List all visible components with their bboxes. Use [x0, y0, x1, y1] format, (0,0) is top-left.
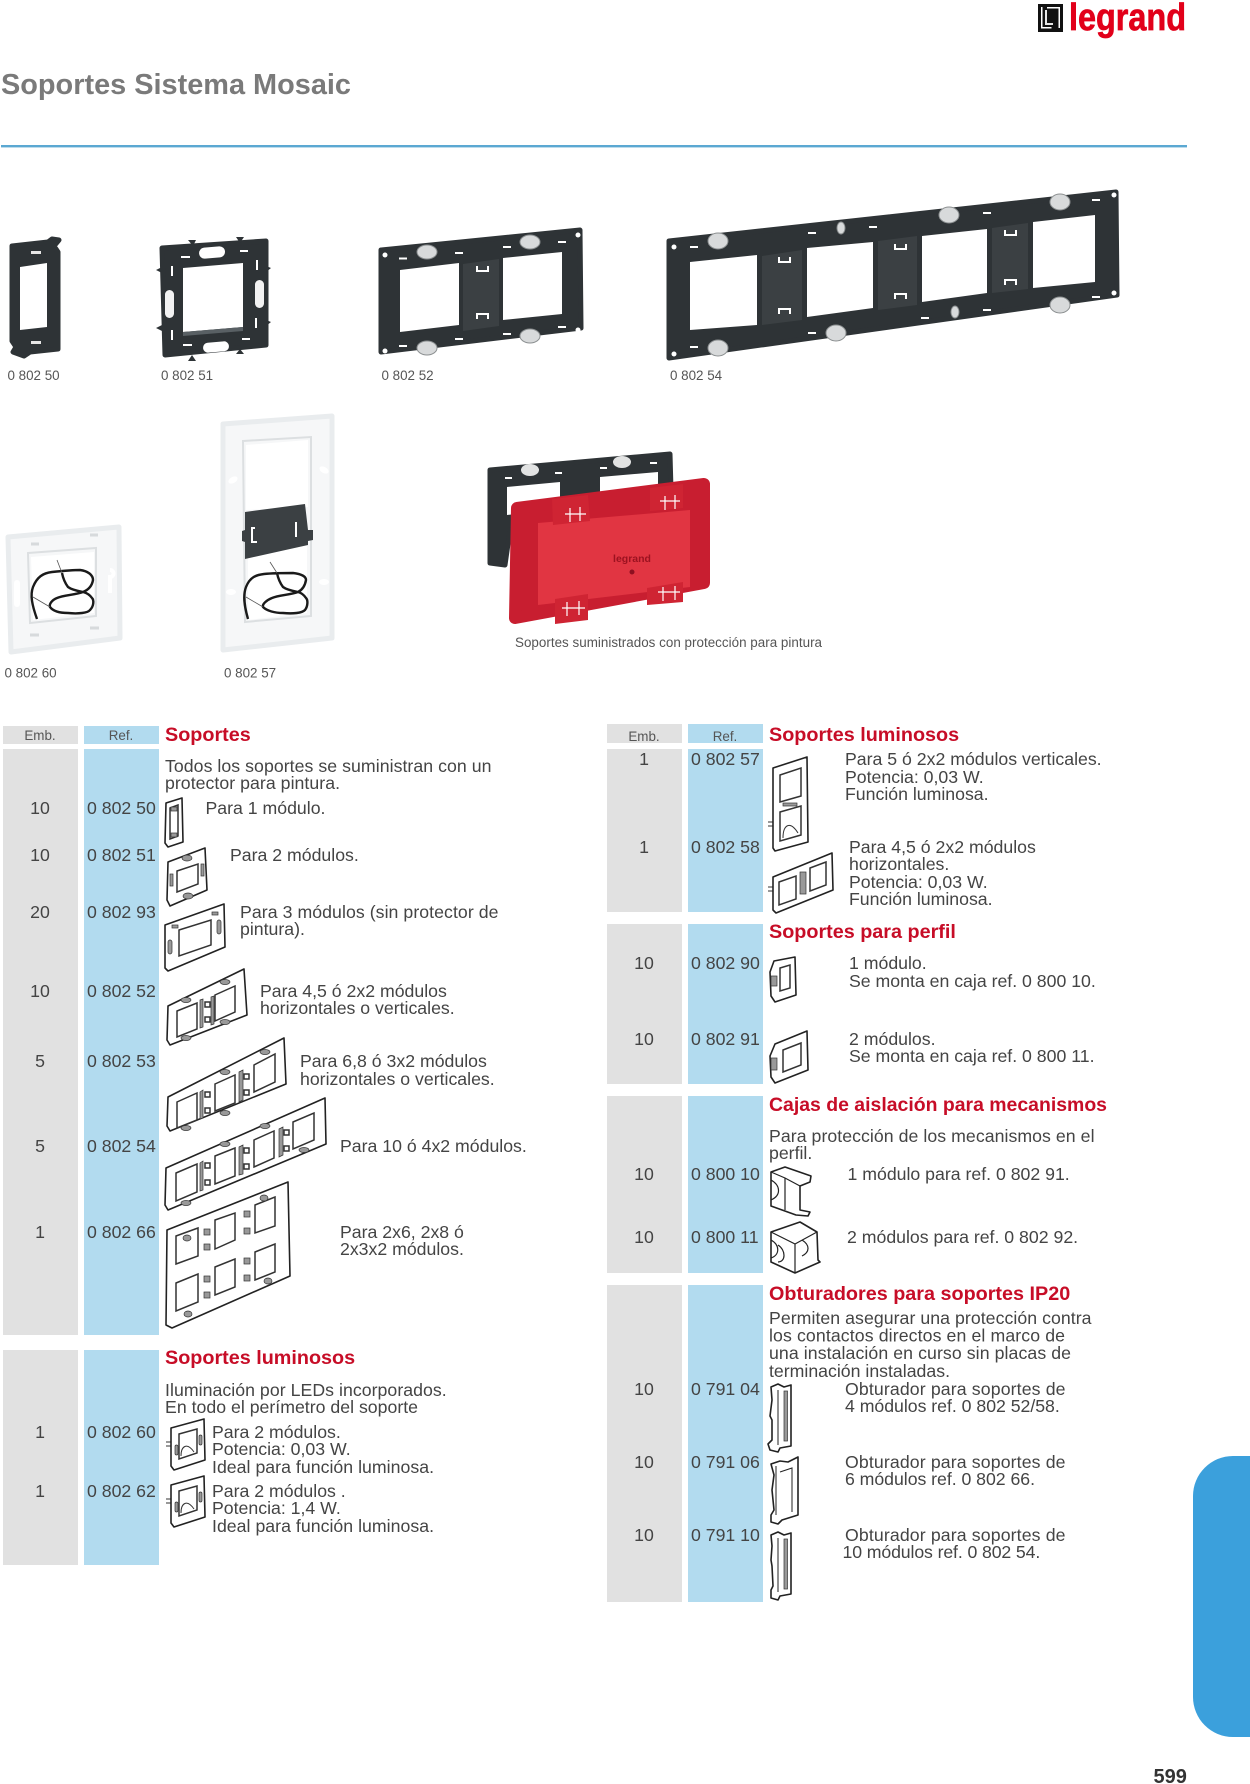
row: 0 802 52: 10	[30, 981, 50, 1001]
table panel: Soportes (left column)	[3, 724, 527, 1335]
column backgrounds	[3, 1350, 159, 1565]
photo: support 0 802 54	[669, 192, 1117, 358]
row: 0 802 93: 0 802 93	[87, 902, 156, 922]
row: 0 802 58: 0 802 58	[691, 837, 760, 857]
intro text	[165, 756, 492, 793]
row: 0 802 53: 5	[35, 1051, 45, 1071]
row: 0 802 66: 1	[35, 1222, 45, 1242]
row: 0 800 10	[634, 1164, 1070, 1216]
header: Ref.	[84, 726, 159, 744]
row: 0 800 11: 2 módulos para ref. 0 802 92.	[847, 1227, 1078, 1247]
photo: support with paint protector	[490, 454, 704, 624]
row: 0 802 51: Para 2 módulos.	[230, 845, 359, 865]
row: 0 802 51	[30, 845, 359, 906]
row: 0 802 58	[639, 837, 1036, 913]
row: 0 802 66: 0 802 66	[87, 1222, 156, 1242]
intro text: los contactos directos en el marco de	[769, 1326, 1065, 1346]
intro text: protector para pintura.	[165, 773, 340, 793]
row: 0 791 04: Obturador para soportes de	[845, 1379, 1066, 1399]
row: 0 802 93	[30, 902, 499, 971]
row: 0 791 04: 10	[634, 1379, 654, 1399]
icon: 3 module support	[165, 904, 225, 971]
photo: support 0 802 51	[156, 237, 271, 361]
column backgrounds	[607, 1096, 763, 1273]
column backgrounds	[607, 749, 763, 912]
row: 0 802 66: Para 2x6, 2x8 ó	[340, 1222, 464, 1242]
row: 0 802 90: 0 802 90	[691, 953, 760, 973]
icon: profile support 1 module	[770, 957, 796, 1002]
row: 0 802 57: Función luminosa.	[845, 784, 989, 804]
row: 0 791 04: 4 módulos ref. 0 802 52/58.	[845, 1396, 1060, 1416]
row: 0 800 10: 10	[634, 1164, 654, 1184]
intro text: Permiten asegurar una protección contra	[769, 1308, 1092, 1328]
icon: horizontal luminous support	[768, 853, 833, 913]
intro text: perfil.	[769, 1143, 812, 1163]
row: 0 802 66: 2x3x2 módulos.	[340, 1239, 464, 1259]
row: 0 802 54: Para 10 ó 4x2 módulos.	[340, 1136, 527, 1156]
row: 0 802 60	[35, 1419, 434, 1477]
row: 0 802 60: Para 2 módulos.	[212, 1422, 341, 1442]
icon: 2x6 module support	[166, 1182, 290, 1328]
icon: 2 module support	[167, 848, 207, 906]
header: Ref.	[688, 724, 763, 744]
photo: luminous support 0 802 60	[8, 527, 120, 652]
heading: Soportes para perfil: Soportes para perfil	[769, 921, 956, 943]
icon: 4 module support	[167, 969, 247, 1045]
row: 0 802 54: 0 802 54	[87, 1136, 156, 1156]
icon: shutter 10 modules	[771, 1532, 791, 1600]
row: 0 802 57: Potencia: 0,03 W.	[845, 767, 984, 787]
row: 0 800 10: 0 800 10	[691, 1164, 760, 1184]
intro text: Todos los soportes se suministran con un	[165, 756, 492, 776]
label: 0 802 51: 0 802 51	[161, 368, 213, 383]
column backgrounds	[607, 1285, 763, 1602]
row: 0 802 58: Función luminosa.	[849, 889, 993, 909]
label: 0 802 54: 0 802 54	[670, 368, 723, 383]
row: 0 791 10	[634, 1525, 1066, 1600]
row: 0 802 50: Para 1 módulo.	[206, 798, 325, 818]
table panel: Soportes luminosos (left column)	[3, 1347, 447, 1565]
row: 0 802 90: 1 módulo.	[849, 953, 927, 973]
row: 0 802 90: Se monta en caja ref. 0 800 10.	[849, 971, 1096, 991]
heading: Soportes luminosos: Soportes luminosos	[769, 724, 959, 746]
row: 0 802 90: 10	[634, 953, 654, 973]
row: 0 802 93: Para 3 módulos (sin protector de	[240, 902, 499, 922]
heading: Soportes: Soportes	[165, 724, 251, 746]
row: 0 802 57: Para 5 ó 2x2 módulos verticales.	[845, 749, 1102, 769]
header: Emb.: Emb.	[628, 729, 660, 744]
row: 0 802 54	[35, 1098, 527, 1210]
side tab	[1193, 1456, 1250, 1737]
row: 0 802 58: Potencia: 0,03 W.	[849, 872, 988, 892]
header: Ref.: Ref.	[713, 729, 737, 744]
row: 0 791 04	[634, 1379, 1066, 1452]
row: 0 802 53: horizontales o verticales.	[300, 1069, 495, 1089]
table panel: Soportes luminosos (right column)	[607, 724, 1102, 913]
row: 0 802 60: 0 802 60	[87, 1422, 156, 1442]
photo: support 0 802 50	[12, 239, 59, 356]
photo: support with paint protector: legrand	[613, 553, 651, 565]
table panel: Obturadores para soportes IP20	[607, 1283, 1092, 1602]
icon: vertical luminous support	[768, 757, 808, 851]
label: 0 802 57: 0 802 57	[224, 666, 276, 680]
logo: legrand	[1038, 0, 1186, 39]
row: 0 800 11	[634, 1222, 1078, 1273]
label: 0 802 52: 0 802 52	[382, 368, 434, 383]
icon: box 1 module	[771, 1167, 811, 1216]
row: 0 802 93: pintura).	[240, 919, 305, 939]
icon: luminous support	[166, 1476, 205, 1527]
row: 0 791 06: 6 módulos ref. 0 802 66.	[845, 1469, 1035, 1489]
header: Emb.	[607, 724, 682, 744]
title: Soportes Sistema Mosaic	[1, 69, 351, 101]
row: 0 802 52: horizontales o verticales.	[260, 998, 455, 1018]
header: Emb.: Emb.	[24, 728, 56, 743]
row: 0 802 53	[35, 1038, 495, 1131]
table panel: Cajas de aislación para mecanismos	[607, 1094, 1107, 1273]
row: 0 800 10: 1 módulo para ref. 0 802 91.	[848, 1164, 1070, 1184]
row: 0 791 10: 10 módulos ref. 0 802 54.	[842, 1542, 1040, 1562]
row: 0 802 66	[35, 1182, 464, 1328]
heading: Soportes luminosos: Soportes luminosos	[165, 1347, 355, 1369]
row: 0 791 10: 10	[634, 1525, 654, 1545]
row: 0 802 50: 10	[30, 798, 50, 818]
intro text	[165, 1380, 447, 1417]
row: 0 802 58: horizontales.	[849, 854, 949, 874]
table panel: Soportes para perfil	[607, 921, 1096, 1084]
row: 0 791 06	[634, 1452, 1066, 1524]
row: 0 802 93: 20	[30, 902, 50, 922]
row: 0 791 06: 0 791 06	[691, 1452, 760, 1472]
row: 0 802 60: 1	[35, 1422, 45, 1442]
icon: shutter 6 modules	[771, 1457, 798, 1524]
heading: Obturadores: Obturadores para soportes IP20	[769, 1283, 1070, 1305]
icon: box 2 modules	[771, 1222, 820, 1273]
intro text	[769, 1308, 1092, 1381]
caption: paint protection: Soportes suministrados con protección para pintura	[515, 635, 823, 650]
intro text	[769, 1126, 1094, 1163]
row: 0 802 52	[30, 969, 455, 1045]
row: 0 802 62	[35, 1476, 434, 1536]
row: 0 802 62: 0 802 62	[87, 1481, 156, 1501]
column backgrounds: Soportes block	[3, 749, 159, 1335]
row: 0 802 53: Para 6,8 ó 3x2 módulos	[300, 1051, 487, 1071]
row: 0 800 11: 0 800 11	[691, 1227, 759, 1247]
row: 0 802 50: 0 802 50	[87, 798, 156, 818]
icon: 1 module support	[165, 798, 183, 847]
row: 0 802 62: Para 2 módulos .	[212, 1481, 346, 1501]
heading: Cajas de aislación: Cajas de aislación para mecanismos	[769, 1094, 1107, 1116]
row: 0 802 60: Ideal para función luminosa.	[212, 1457, 434, 1477]
row: 0 791 04: 0 791 04	[691, 1379, 760, 1399]
row: 0 802 62: Potencia: 1,4 W.	[212, 1498, 341, 1518]
column backgrounds	[607, 924, 763, 1084]
icon: 10 module support	[165, 1098, 326, 1210]
row: 0 791 06: 10	[634, 1452, 654, 1472]
row: 0 802 62: Ideal para función luminosa.	[212, 1516, 434, 1536]
label: 0 802 50: 0 802 50	[8, 368, 60, 383]
row: 0 802 58: Para 4,5 ó 2x2 módulos	[849, 837, 1036, 857]
row: 0 802 54: 5	[35, 1136, 45, 1156]
icon: luminous support	[166, 1419, 205, 1470]
header: Emb.	[3, 726, 78, 744]
row: 0 802 60: Potencia: 0,03 W.	[212, 1439, 351, 1459]
row: 0 802 57: 1	[639, 749, 649, 769]
row: 0 802 53: 0 802 53	[87, 1051, 156, 1071]
row: 0 791 10: Obturador para soportes de	[845, 1525, 1066, 1545]
row: 0 802 57	[639, 749, 1102, 851]
row: 0 802 62: 1	[35, 1481, 45, 1501]
row: 0 802 91	[634, 1029, 1094, 1083]
intro text: terminación instaladas.	[769, 1361, 950, 1381]
row: 0 802 52: Para 4,5 ó 2x2 módulos	[260, 981, 447, 1001]
row: 0 802 50	[30, 798, 325, 847]
row: 0 800 11: 10	[634, 1227, 654, 1247]
photo: support 0 802 52	[381, 230, 581, 355]
intro text: Para protección de los mecanismos en el	[769, 1126, 1094, 1146]
row: 0 802 91: 0 802 91	[691, 1029, 760, 1049]
icon: 6 module support	[167, 1038, 286, 1131]
row: 0 791 10: 0 791 10	[691, 1525, 760, 1545]
intro text: Iluminación por LEDs incorporados.	[165, 1380, 447, 1400]
row: 0 791 06: Obturador para soportes de	[845, 1452, 1066, 1472]
row: 0 802 57: 0 802 57	[691, 749, 760, 769]
row: 0 802 51: 10	[30, 845, 50, 865]
intro text: En todo el perímetro del soporte	[165, 1397, 418, 1417]
header: Ref.: Ref.	[109, 728, 133, 743]
intro text: una instalación en curso sin placas de	[769, 1343, 1071, 1363]
row: 0 802 90	[634, 953, 1096, 1002]
row: 0 802 51: 0 802 51	[87, 845, 156, 865]
icon: profile support 2 modules	[770, 1031, 808, 1083]
photo: luminous support 0 802 57	[223, 416, 332, 650]
row: 0 802 52: 0 802 52	[87, 981, 156, 1001]
label: 0 802 60: 0 802 60	[4, 666, 57, 680]
row: 0 802 91: 2 módulos.	[849, 1029, 936, 1049]
row: 0 802 91: Se monta en caja ref. 0 800 11.	[849, 1046, 1094, 1066]
row: 0 802 91: 10	[634, 1029, 654, 1049]
icon: shutter 4 modules	[768, 1384, 791, 1452]
row: 0 802 58: 1	[639, 837, 649, 857]
